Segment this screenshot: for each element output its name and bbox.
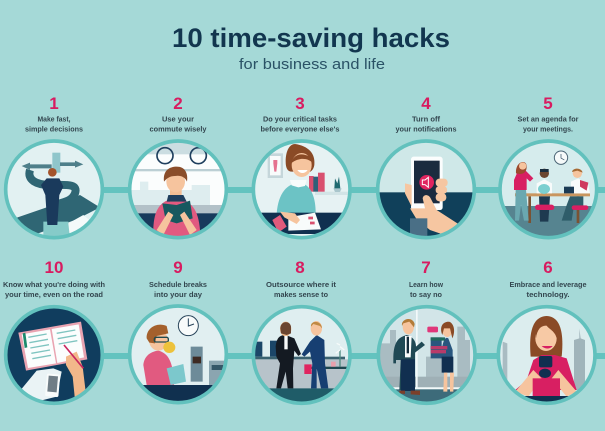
step 2 text: 2 <box>173 94 183 113</box>
step 5 text: Set an agenda for <box>518 114 579 124</box>
step 5 text <box>518 94 579 134</box>
connector: top row <box>100 187 605 193</box>
step 10 text: your time, even on the road <box>5 290 103 299</box>
icon: handshake <box>252 305 355 405</box>
step 7 text <box>409 258 443 299</box>
step 9 text: 9 <box>173 258 183 277</box>
icon: crossroads decision <box>4 139 104 240</box>
step 8 text: Outsource where it <box>266 280 337 289</box>
step 10 text: Know what you're doing with <box>3 280 105 289</box>
step 6 text: 6 <box>543 258 553 277</box>
step 3 text: 3 <box>295 94 305 113</box>
icon: commuter reading <box>127 137 230 243</box>
step 5 text: your meetings. <box>523 124 573 134</box>
icon: learn to say no <box>377 305 477 406</box>
step 9 text: Schedule breaks <box>149 280 207 289</box>
step 8 text: 8 <box>295 258 305 277</box>
icon: coffee break <box>128 305 230 405</box>
step 7 text: 7 <box>421 258 431 277</box>
title: 10 time-saving hacks <box>172 23 450 53</box>
step 4 text <box>396 94 456 134</box>
step 10 text: 10 <box>45 258 63 277</box>
step 3 text: Do your critical tasks <box>263 114 337 124</box>
icon: team meeting <box>498 140 600 239</box>
step 6 text: technology. <box>526 290 570 299</box>
step 5 text: 5 <box>543 94 553 113</box>
subtitle: for business and life <box>239 56 385 73</box>
step 3 text: before everyone else's <box>260 124 340 134</box>
step 1 text <box>25 94 83 134</box>
step 8 text <box>266 258 337 299</box>
connector: bottom row <box>100 353 605 359</box>
step 4 text: Turn off <box>412 114 441 124</box>
icon: phone in hand muted <box>377 140 477 242</box>
icon: woman with smartphone <box>497 305 598 406</box>
step 9 text <box>149 258 207 299</box>
step 4 text: 4 <box>421 94 431 113</box>
step 6 text: Embrace and leverage <box>510 280 586 289</box>
step 3 text <box>260 94 340 134</box>
step 1 text: simple decisions <box>25 124 83 134</box>
step 7 text: to say no <box>410 290 443 299</box>
step 10 text <box>3 258 105 299</box>
step 9 text: into your day <box>154 290 202 299</box>
icon: planner and hand <box>3 305 107 405</box>
step 2 text: Use your <box>162 114 194 124</box>
step 2 text: commute wisely <box>150 124 206 134</box>
step 1 text: 1 <box>49 94 59 113</box>
icon: woman at desk <box>252 140 355 241</box>
step 6 text <box>510 258 586 299</box>
step 4 text: your notifications <box>396 124 456 134</box>
step 7 text: Learn how <box>409 280 443 289</box>
step 8 text: makes sense to <box>274 290 329 299</box>
step 2 text <box>150 94 206 134</box>
step 1 text: Make fast, <box>38 114 70 124</box>
